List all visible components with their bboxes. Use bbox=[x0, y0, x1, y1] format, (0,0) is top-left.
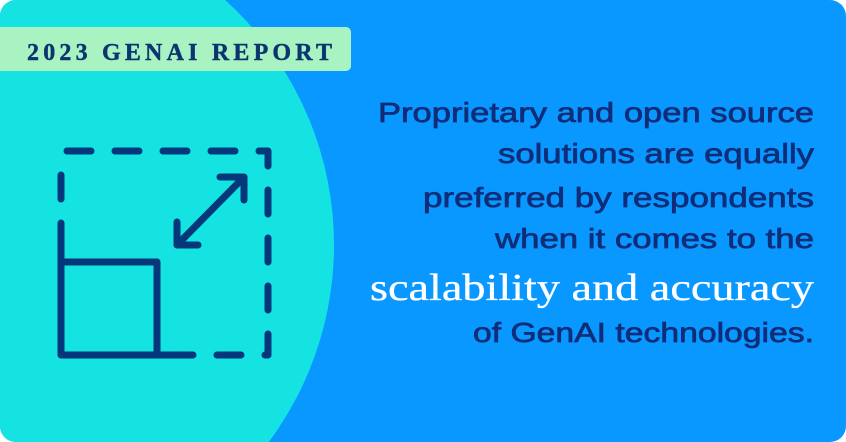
headline text: of GenAI technologies. bbox=[473, 317, 814, 348]
icon: scale / resize bbox=[61, 151, 268, 355]
headline text: Proprietary and open source bbox=[378, 97, 814, 128]
headline text: scalability and accuracy bbox=[370, 267, 814, 309]
headline text bbox=[370, 97, 814, 348]
headline text: preferred by respondents bbox=[423, 182, 814, 213]
badge: 2023 GenAI Report bbox=[0, 27, 351, 71]
headline text: solutions are equally bbox=[498, 138, 814, 169]
badge: 2023 GenAI Report: 2023 GENAI REPORT bbox=[27, 40, 332, 66]
headline text: when it comes to the bbox=[494, 223, 814, 254]
